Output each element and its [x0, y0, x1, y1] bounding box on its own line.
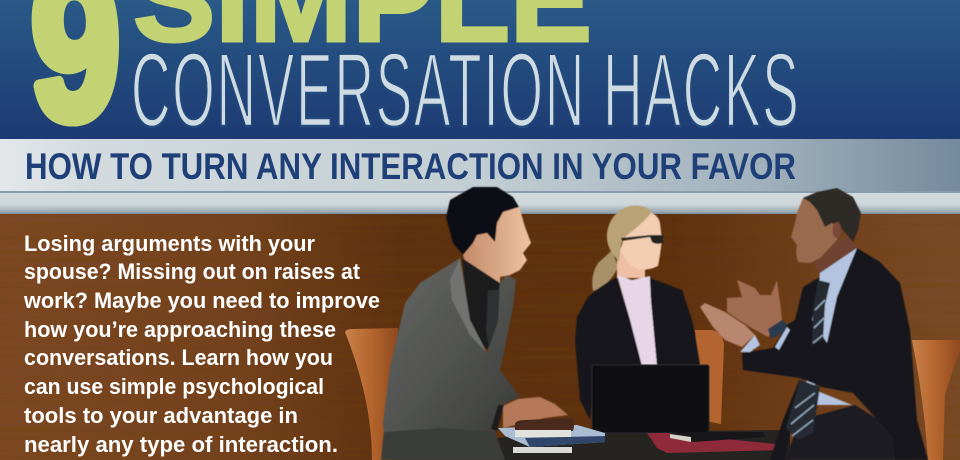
glasses: [621, 235, 663, 244]
hair: [803, 188, 861, 242]
wood panel: [0, 214, 960, 460]
blue shirt: [806, 248, 857, 405]
silver ledge: [0, 193, 960, 214]
intro text block: can use simple psychological: [24, 374, 324, 399]
lapel: [450, 258, 487, 353]
intro text block: tools to your advantage in: [24, 403, 298, 428]
intro text block: conversations. Learn how you: [24, 345, 333, 370]
middle chair: [695, 330, 724, 424]
shirt cuff: [740, 335, 760, 352]
folder edge: [525, 436, 605, 447]
intro text block: how you’re approaching these: [24, 317, 336, 342]
intro text block: Losing arguments with your: [24, 231, 315, 256]
face: [620, 212, 662, 270]
title: CONVERSATION HACKS: CONVERSATION HACKS: [131, 31, 799, 149]
neck: [617, 250, 645, 278]
striped tie: [786, 280, 830, 440]
face: [791, 195, 845, 263]
ear: [475, 232, 487, 250]
ear: [832, 222, 842, 238]
left chair: [345, 328, 398, 460]
trousers: [381, 426, 505, 460]
face and neck: [463, 206, 531, 310]
subtitle: HOW TO TURN ANY INTERACTION IN YOUR FAVOR: [25, 146, 796, 187]
lower pages: [513, 447, 572, 453]
blue folder: [498, 425, 605, 447]
black shirt and tie: [462, 258, 500, 350]
gray suit: [383, 258, 520, 432]
trousers: [785, 405, 905, 460]
neck: [810, 235, 857, 275]
book pages: [515, 430, 571, 437]
red folder: [647, 433, 785, 457]
header background: [0, 0, 960, 139]
back hand: [700, 303, 755, 347]
hand: [503, 397, 568, 428]
sleeve cuff: [491, 405, 504, 431]
black jacket: [742, 248, 928, 460]
near shirt cuff: [775, 327, 790, 350]
front hand: [727, 280, 782, 337]
notebook pages: [670, 434, 691, 442]
stack of books: [498, 418, 605, 453]
intro text block: work? Maybe you need to improve: [23, 288, 380, 313]
intro text block: nearly any type of interaction.: [24, 432, 338, 457]
watch: [768, 320, 787, 339]
subtitle band: [0, 139, 960, 193]
table: [497, 430, 790, 460]
person: man in black suit: [700, 188, 928, 460]
hair: [446, 187, 519, 255]
intro text block: [23, 231, 380, 457]
intro text block: spouse? Missing out on raises at: [24, 259, 361, 284]
right chair: [912, 340, 960, 460]
ponytail: [592, 250, 618, 291]
jacket: [575, 277, 700, 420]
laptop: [592, 365, 709, 433]
black notebook: [670, 432, 765, 442]
hair: [607, 206, 652, 262]
person: woman: [575, 206, 700, 420]
blouse: [617, 275, 657, 365]
person: man in gray suit: [381, 187, 568, 460]
brown book: [515, 418, 574, 431]
